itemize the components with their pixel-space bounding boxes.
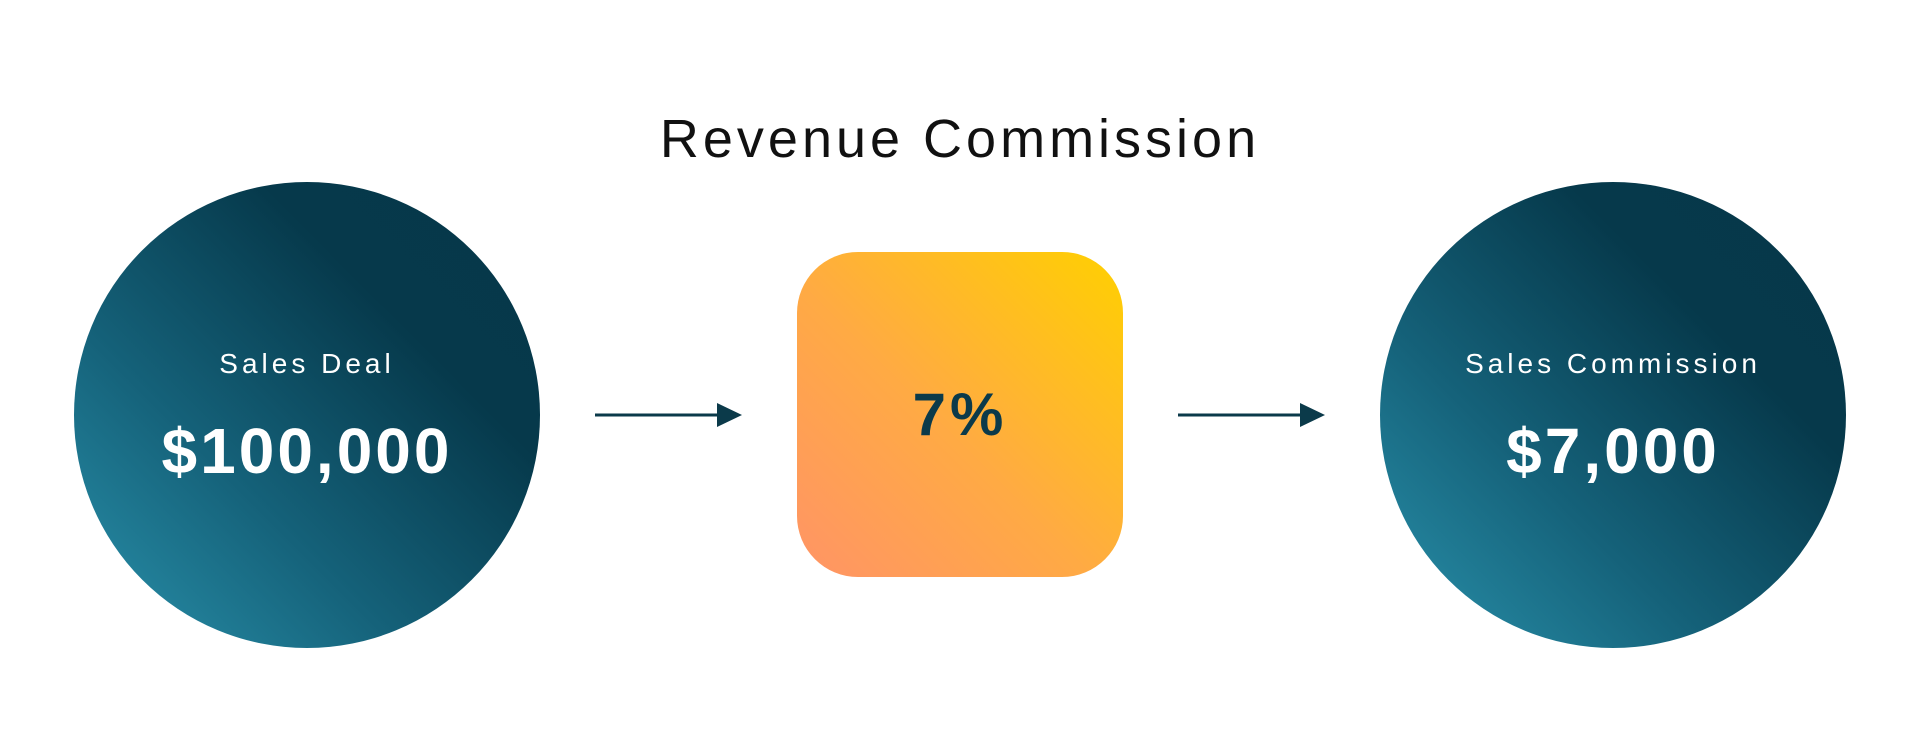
value: sales deal: $100,000	[162, 415, 452, 487]
arrow: right	[1178, 403, 1325, 427]
label: sales deal: Sales Deal	[219, 348, 395, 379]
arrow: left	[595, 403, 742, 427]
panel: sales commission circle	[1380, 182, 1846, 648]
title: Revenue Commission	[660, 109, 1260, 169]
value: rate: 7%	[913, 381, 1007, 448]
label: sales commission: Sales Commission	[1465, 348, 1761, 379]
value: sales commission: $7,000	[1506, 415, 1720, 487]
panel: sales deal circle	[74, 182, 540, 648]
panel: rate square	[797, 252, 1123, 577]
